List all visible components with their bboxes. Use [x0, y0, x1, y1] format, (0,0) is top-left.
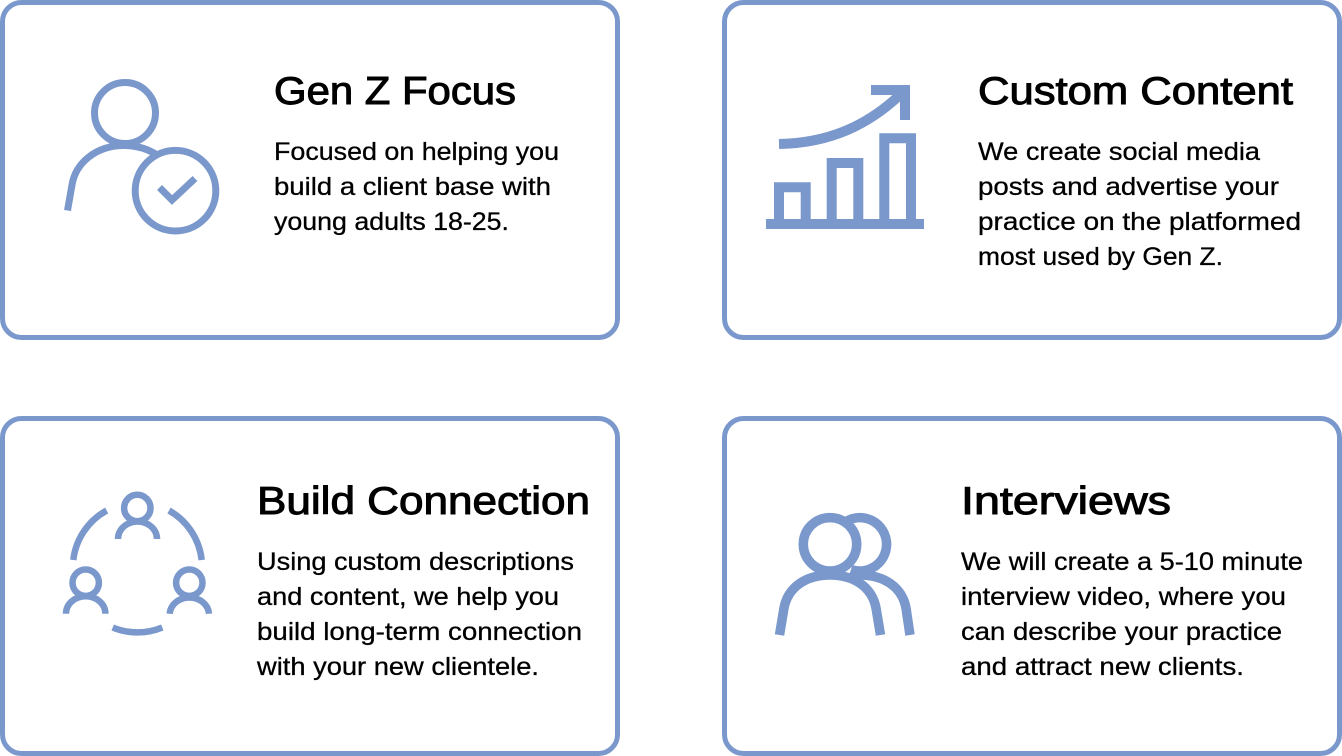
- heading: Build Connection: Build Connection: [257, 480, 590, 523]
- text block: Gen Z Focus description: build a client base with: [274, 173, 551, 201]
- icon: two people: [780, 518, 910, 635]
- text block: Build Connection description: Using custom descriptions: [257, 548, 574, 576]
- icon: rising bar chart with arrow: [766, 90, 924, 224]
- card outline: Build Connection: [2, 418, 618, 754]
- heading: Interviews: Interviews: [961, 480, 1171, 523]
- text block: Interviews description: can describe your practice: [961, 618, 1282, 646]
- text block: Interviews description: We will create a 5-10 minute: [961, 548, 1303, 576]
- icon: three connected people: [66, 495, 209, 632]
- text block: Gen Z Focus description: [274, 138, 559, 236]
- heading: Gen Z Focus: Gen Z Focus: [274, 70, 516, 113]
- text block: Build Connection description: with your new clientele.: [256, 653, 539, 681]
- text block: Custom Content description: We create social media: [978, 138, 1260, 166]
- card outline: Custom Content: [724, 2, 1340, 338]
- text block: Gen Z Focus description: young adults 18-25.: [274, 208, 509, 236]
- text block: Custom Content description: [978, 138, 1301, 271]
- text block: Build Connection description: build long-term connection: [257, 618, 582, 646]
- text block: Build Connection description: and content, we help you: [257, 583, 559, 611]
- text block: Custom Content description: most used by Gen Z.: [978, 243, 1223, 271]
- panel: Build Connection: [2, 418, 618, 754]
- panel: Interviews: [724, 418, 1340, 754]
- text block: Custom Content description: practice on the platformed: [978, 208, 1301, 236]
- text block: Gen Z Focus description: Focused on helping you: [274, 138, 559, 166]
- text block: Build Connection description: [256, 548, 582, 681]
- card outline: Interviews: [724, 418, 1340, 754]
- text block: Custom Content description: posts and advertise your: [978, 173, 1279, 201]
- text block: Interviews description: [961, 548, 1303, 681]
- text block: Interviews description: interview video, where you: [961, 583, 1286, 611]
- text block: Interviews description: and attract new clients.: [961, 653, 1244, 681]
- heading: Custom Content: Custom Content: [978, 70, 1293, 113]
- icon: person with check mark: [68, 82, 216, 231]
- card outline: Gen Z Focus: [2, 2, 618, 338]
- panel: Gen Z Focus: [2, 2, 618, 338]
- panel: Custom Content: [724, 2, 1340, 338]
